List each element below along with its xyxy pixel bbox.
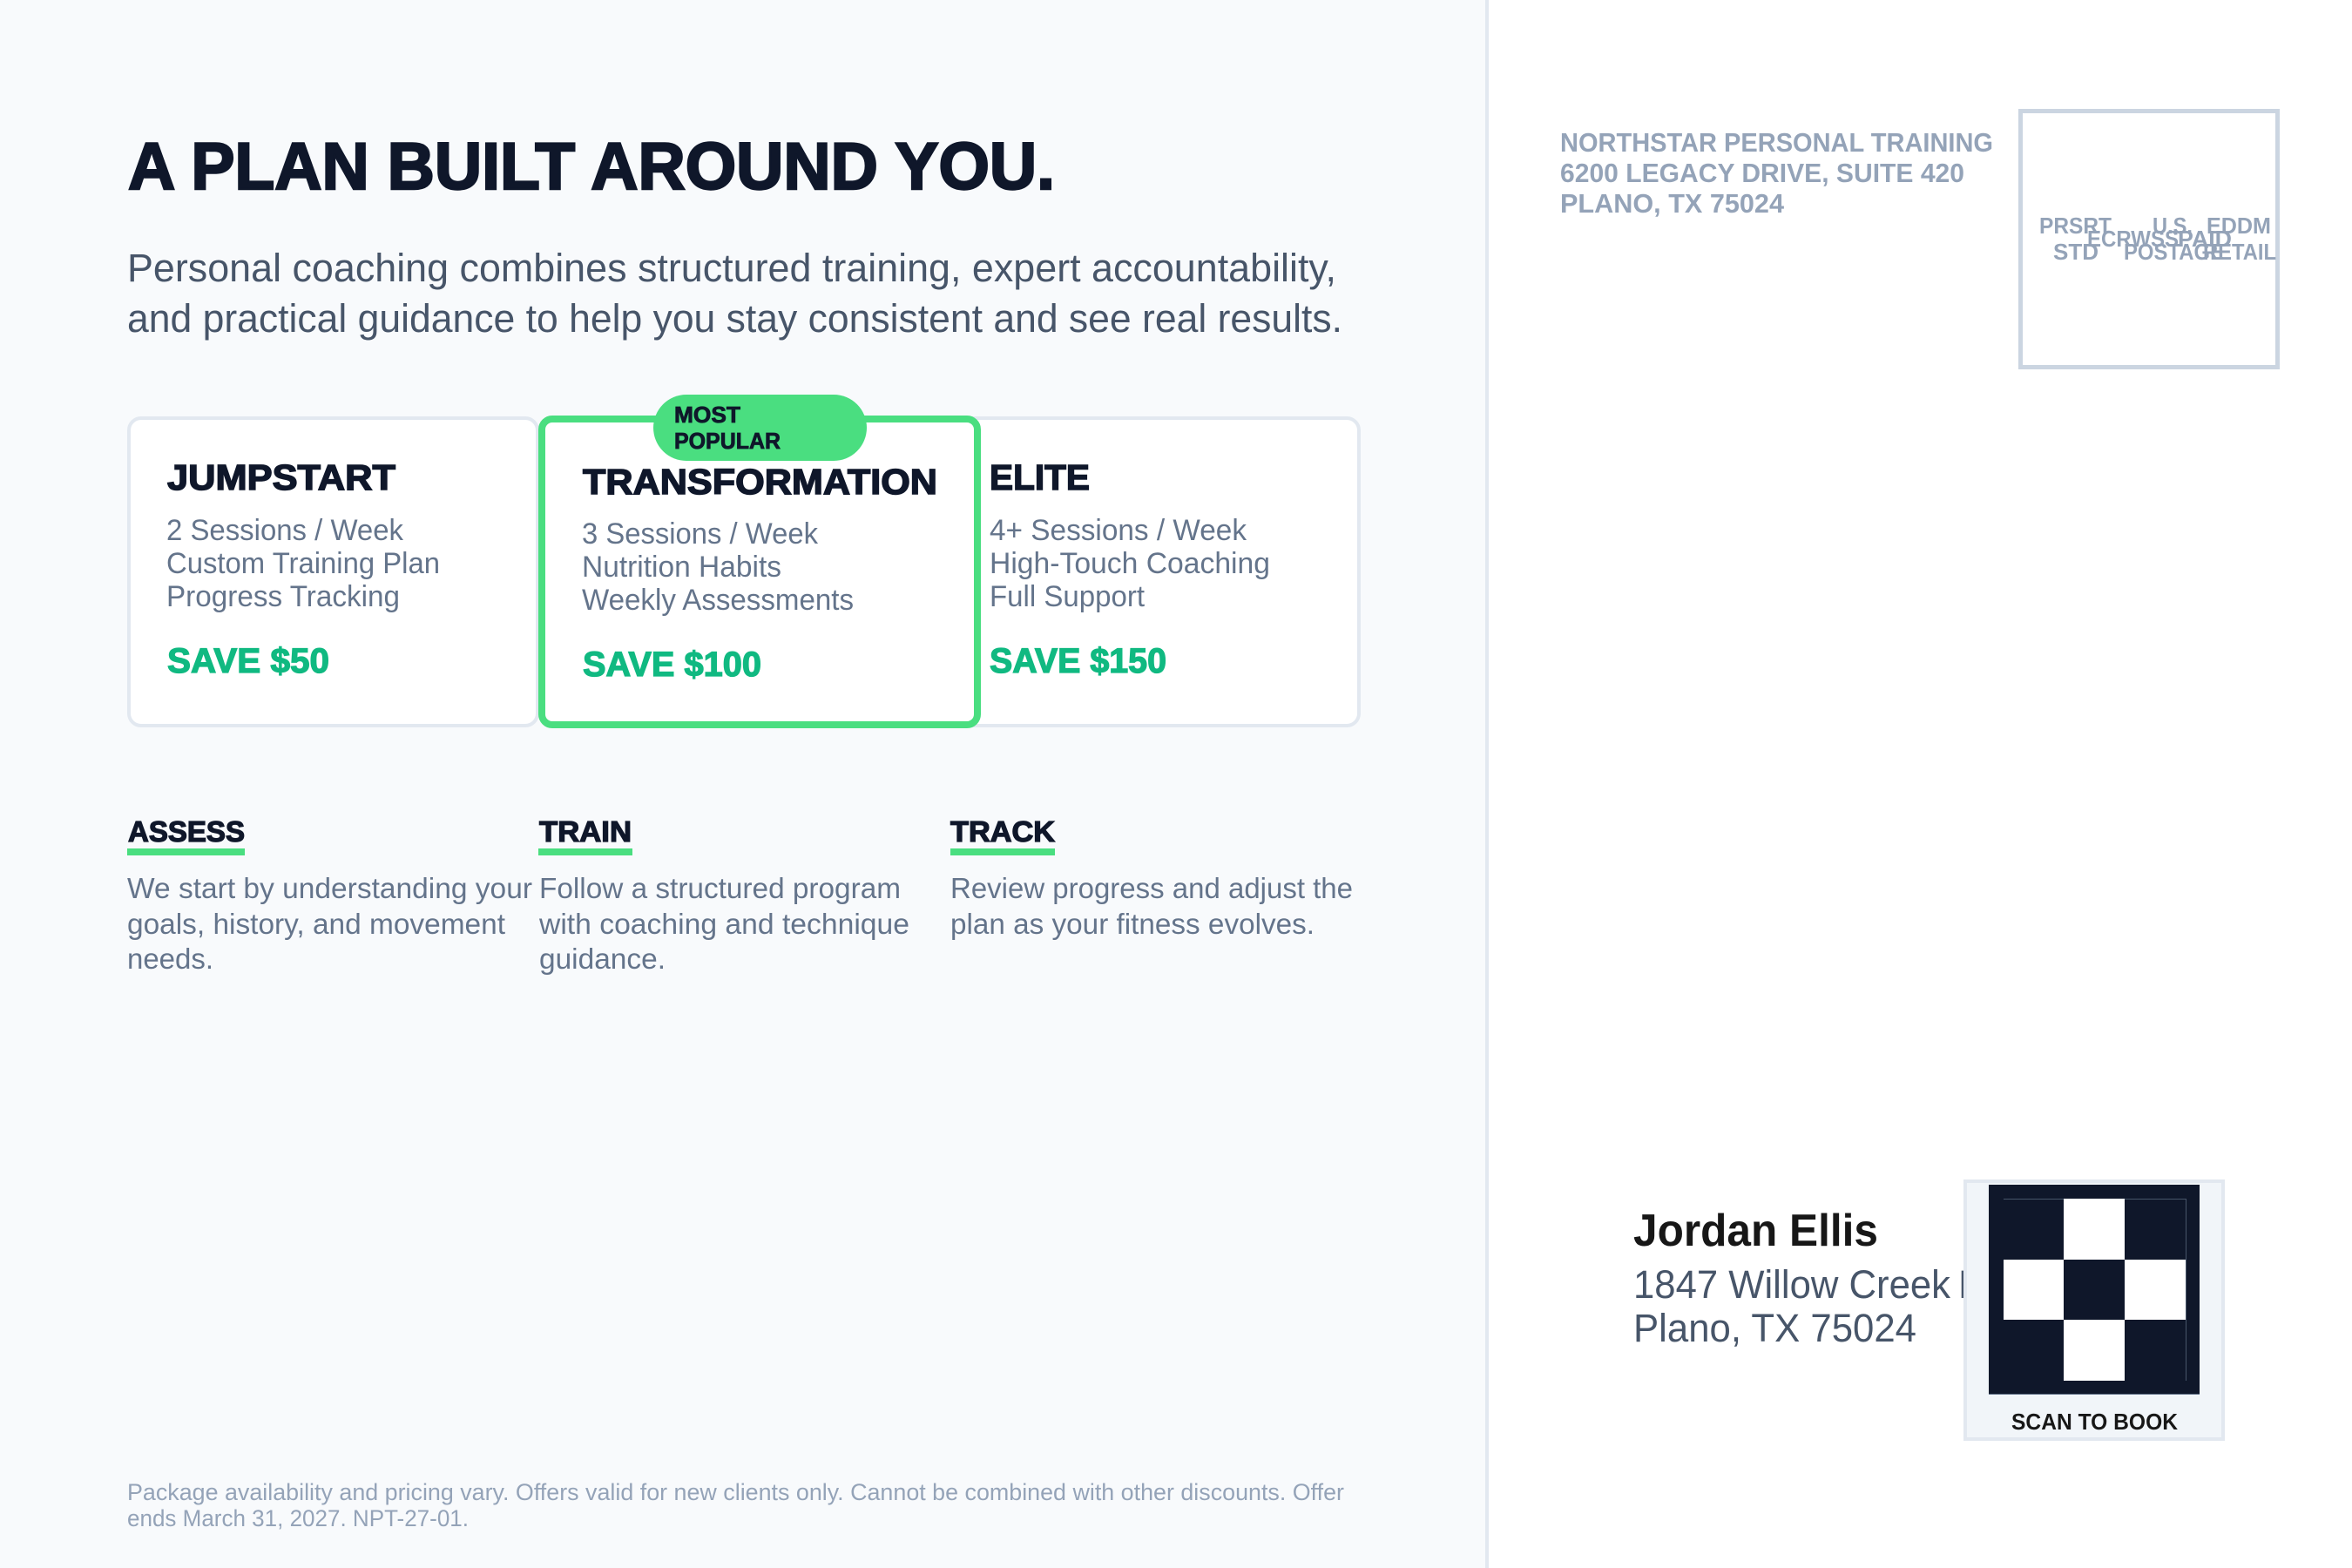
plan features: Custom Training Plan bbox=[166, 547, 440, 580]
step: track: Review progress and adjust the bbox=[950, 872, 1353, 904]
postage indicia bbox=[2021, 112, 2277, 368]
panel: Elite plan bbox=[950, 418, 1359, 726]
plan features: 4+ Sessions / Week bbox=[990, 514, 1247, 547]
step: train: with coaching and technique bbox=[538, 908, 909, 940]
recipient address: Drive bbox=[1958, 1262, 2050, 1307]
postage indicia: PAID bbox=[2178, 226, 2232, 252]
badge: most popular: MOST bbox=[674, 402, 740, 428]
step: assess: goals, history, and movement bbox=[127, 908, 505, 940]
plan features: Full Support bbox=[990, 580, 1146, 613]
panel: message side bbox=[0, 0, 1489, 1568]
step: assess: We start by understanding your bbox=[127, 872, 532, 904]
savings: SAVE $50 bbox=[167, 642, 329, 680]
postage indicia: POSTAGE bbox=[2124, 239, 2224, 265]
plan features bbox=[166, 514, 440, 613]
postage indicia: U.S. bbox=[2153, 213, 2193, 239]
plan features bbox=[990, 514, 1270, 613]
step: assess: ASSESS bbox=[128, 815, 245, 848]
plan features: High-Touch Coaching bbox=[990, 547, 1270, 580]
step: track bbox=[950, 815, 1353, 940]
plan name: ELITE bbox=[990, 457, 1090, 497]
panel: Transformation plan bbox=[542, 395, 977, 725]
QR caption: SCAN TO BOOK bbox=[2011, 1409, 2178, 1435]
plan features: Progress Tracking bbox=[166, 580, 400, 613]
panel: Jumpstart plan bbox=[129, 418, 537, 726]
step: assess: needs. bbox=[127, 943, 213, 975]
postage indicia: RETAIL bbox=[2203, 239, 2276, 265]
return address bbox=[1560, 127, 1993, 219]
recipient address: 1847 Willow Creek bbox=[1633, 1262, 1950, 1307]
step: assess bbox=[127, 815, 532, 975]
disclaimer bbox=[127, 1479, 1344, 1531]
postage indicia: STD bbox=[2053, 239, 2099, 265]
plan features bbox=[582, 517, 854, 617]
return address: PLANO, TX 75024 bbox=[1560, 188, 1785, 219]
postage indicia: PRSRT bbox=[2039, 213, 2112, 239]
postage indicia: ECRWSS bbox=[2087, 226, 2179, 252]
savings: SAVE $100 bbox=[583, 645, 761, 684]
return address: NORTHSTAR PERSONAL TRAINING bbox=[1560, 127, 1993, 158]
step: track: TRACK bbox=[950, 815, 1055, 848]
step: train: guidance. bbox=[539, 943, 666, 975]
plan features: 3 Sessions / Week bbox=[582, 517, 819, 551]
plan name: JUMPSTART bbox=[167, 457, 395, 497]
step: train: Follow a structured program bbox=[539, 872, 901, 904]
step: train: TRAIN bbox=[539, 815, 632, 848]
badge: most popular bbox=[653, 395, 867, 461]
recipient address bbox=[1633, 1206, 2050, 1350]
step: track: plan as your fitness evolves. bbox=[950, 908, 1315, 940]
plan features: Nutrition Habits bbox=[582, 551, 781, 584]
title: A PLAN BUILT AROUND YOU. bbox=[128, 130, 1055, 204]
plan features: Weekly Assessments bbox=[582, 584, 854, 617]
recipient address: Jordan Ellis bbox=[1633, 1206, 1878, 1256]
intro paragraph: and practical guidance to help you stay consistent and see real results. bbox=[127, 296, 1342, 341]
QR code panel bbox=[1965, 1181, 2223, 1439]
intro paragraph: Personal coaching combines structured training, expert accountability, bbox=[127, 246, 1336, 290]
postage indicia: EDDM bbox=[2207, 213, 2271, 239]
recipient address: Plano, TX 75024 bbox=[1633, 1306, 1916, 1350]
plan features: 2 Sessions / Week bbox=[166, 514, 404, 547]
disclaimer: ends March 31, 2027. NPT-27-01. bbox=[127, 1505, 469, 1531]
step: train bbox=[538, 815, 909, 975]
return address: 6200 LEGACY DRIVE, SUITE 420 bbox=[1560, 158, 1964, 188]
plan name: TRANSFORMATION bbox=[583, 462, 937, 502]
badge: most popular: POPULAR bbox=[674, 428, 781, 454]
QR code bbox=[1989, 1185, 2200, 1395]
savings: SAVE $150 bbox=[990, 642, 1166, 680]
intro paragraph bbox=[127, 246, 1342, 341]
disclaimer: Package availability and pricing vary. Offers valid for new clients only. Cannot be combined with other discounts. Offer bbox=[127, 1479, 1344, 1505]
